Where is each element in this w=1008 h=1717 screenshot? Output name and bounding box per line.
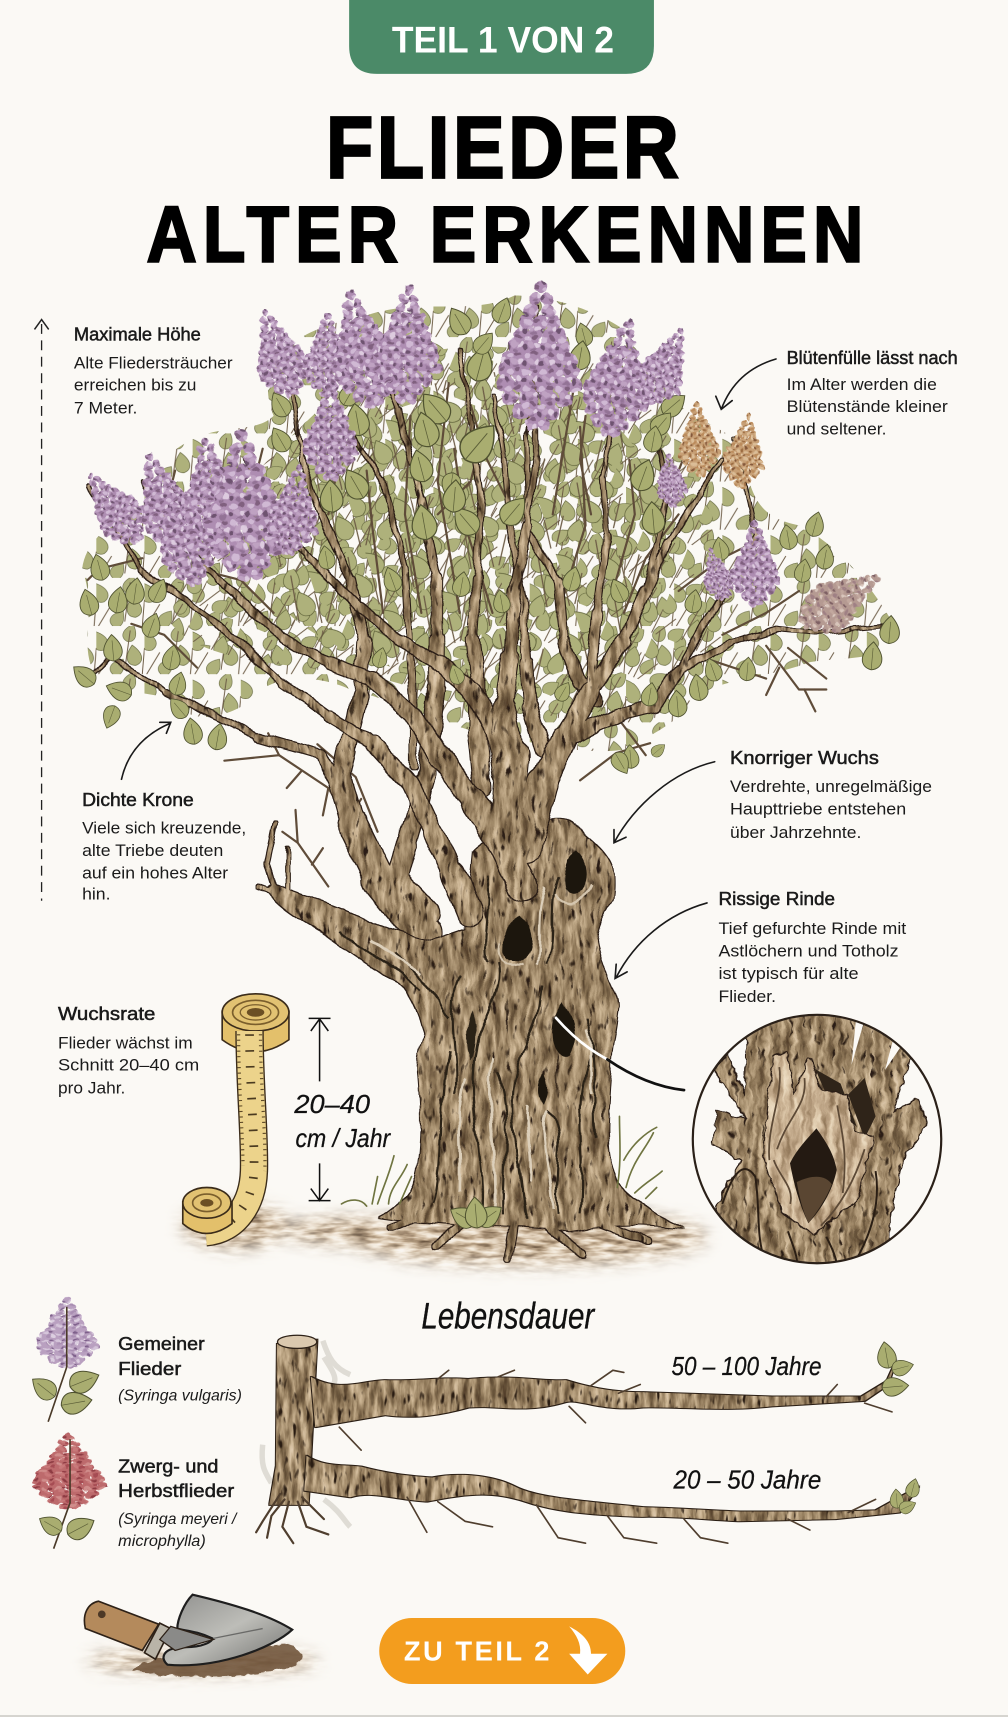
callout: Knorriger Wuchs: Knorriger Wuchs [730,748,879,768]
height measure dashed arrow [34,320,49,901]
title: ALTER ERKENNEN [147,190,863,279]
callout: Blütenfülle lässt nach: Blütenfülle lässt nach [787,348,958,368]
icon: curved down arrow [569,1626,607,1675]
arrow: Dichte Krone [121,722,171,779]
text: Zwerg- und Herbstflieder [118,1457,238,1550]
callout: Blütenfülle lässt nach: Blütenstände kleiner [787,397,948,416]
button: Zu Teil 2: ZU TEIL 2 [404,1636,549,1667]
callout: Blütenfülle lässt nach: und seltener. [787,420,887,439]
callout: Rissige Rinde: Astlöchern und Totholz [719,942,899,961]
callout: Rissige Rinde [719,889,907,1006]
callout: Maximale Höhe: 7 Meter. [74,398,137,417]
callout: Maximale Höhe: erreichen bis zu [74,376,196,395]
callout: Dichte Krone: auf ein hohes Alter [82,863,229,882]
callout: Wuchsrate: Wuchsrate [58,1004,155,1024]
part badge: Teil 1 von 2: TEIL 1 VON 2 [392,19,614,61]
bottom edge line [0,1715,1008,1717]
back stems [93,350,596,934]
callout: Wuchsrate: Flieder wächst im [58,1033,193,1052]
vertical stem with roots [256,1335,350,1543]
callout: Knorriger Wuchs: über Jahrzehnte. [730,823,861,842]
text: Zwerg- und Herbstflieder: (Syringa meyeri / [118,1511,238,1528]
label: 20–40 cm / Jahr [293,1089,391,1153]
icon: measuring tape [183,994,289,1233]
icon: dwarf lilac sprig [33,1434,108,1549]
part badge: Teil 1 von 2 [349,0,654,74]
chart: lifespan branches [256,1335,922,1543]
lower branch: 20–50 Jahre [304,1456,922,1543]
callout: Rissige Rinde: Tief gefurchte Rinde mit [719,919,907,938]
gnarled trunk with old limb and holes [257,819,684,1259]
text: Gemeiner Flieder: Gemeiner [118,1334,205,1354]
growth measure arrow [309,1018,331,1201]
callout: Maximale Höhe [74,324,233,417]
label: 20–40 cm / Jahr: cm / Jahr [296,1123,391,1153]
callout: Blütenfülle lässt nach [787,348,958,439]
callout: Rissige Rinde: Rissige Rinde [719,889,835,909]
callout: Maximale Höhe: Alte Fliedersträucher [74,354,233,373]
front stems [90,306,887,914]
grass and seedling at trunk base [341,1116,662,1232]
text: Gemeiner Flieder [118,1334,242,1405]
text: Gemeiner Flieder: Flieder [118,1359,181,1379]
arrow: Rissige Rinde [615,903,707,978]
foliage edge leaves [68,295,901,778]
callout: Rissige Rinde: ist typisch für alte [719,964,859,983]
callout: Wuchsrate [58,1004,199,1097]
callout: Dichte Krone: hin. [82,885,111,904]
callout: Dichte Krone: Dichte Krone [82,790,194,810]
title: FLIEDER [326,99,679,196]
label: 50 – 100 Jahre: 50 – 100 Jahre [672,1351,822,1381]
icon: common lilac sprig [27,1298,103,1422]
crown foliage mass [82,296,900,751]
ground under the tree and tape [183,1204,706,1265]
callout: Blütenfülle lässt nach: Im Alter werden die [787,375,937,394]
icon: garden trowel [84,1595,317,1677]
arrow: Knorriger Wuchs [614,762,715,843]
callout: Knorriger Wuchs [730,748,932,842]
callout: Knorriger Wuchs: Verdrehte, unregelmäßige [730,777,932,796]
text: Gemeiner Flieder: (Syringa vulgaris) [118,1388,242,1405]
arrow: Blütenfülle [716,359,776,409]
label: 20 – 50 Jahre: 20 – 50 Jahre [673,1464,821,1494]
callout: Rissige Rinde: Flieder. [719,987,776,1006]
lilac flower panicles [70,279,894,648]
pointer line from trunk hole to detail circle [556,1018,684,1090]
tree: foliage, branches, trunk and flowers [68,279,901,1259]
callout: Dichte Krone: alte Triebe deuten [82,841,223,860]
label: 20–40 cm / Jahr: 20–40 [293,1089,370,1119]
text: Zwerg- und Herbstflieder: Herbstflieder [118,1481,234,1501]
callout: Knorriger Wuchs: Haupttriebe entstehen [730,800,906,819]
callout: Wuchsrate: pro Jahr. [58,1078,125,1097]
text: Zwerg- und Herbstflieder: Zwerg- und [118,1457,218,1477]
text: Zwerg- und Herbstflieder: microphylla) [118,1533,206,1550]
callout: Wuchsrate: Schnitt 20–40 cm [58,1056,199,1075]
button: Zu Teil 2 [379,1618,625,1684]
detail circle: bark close-up [693,1012,941,1270]
thin twigs [88,383,826,887]
title [147,99,863,279]
callout: Dichte Krone [82,790,246,904]
upper branch: 50–100 Jahre [311,1340,915,1450]
callout: Dichte Krone: Viele sich kreuzende, [82,818,246,837]
callout: Maximale Höhe: Maximale Höhe [74,324,201,344]
heading: Lebensdauer: Lebensdauer [421,1295,596,1337]
